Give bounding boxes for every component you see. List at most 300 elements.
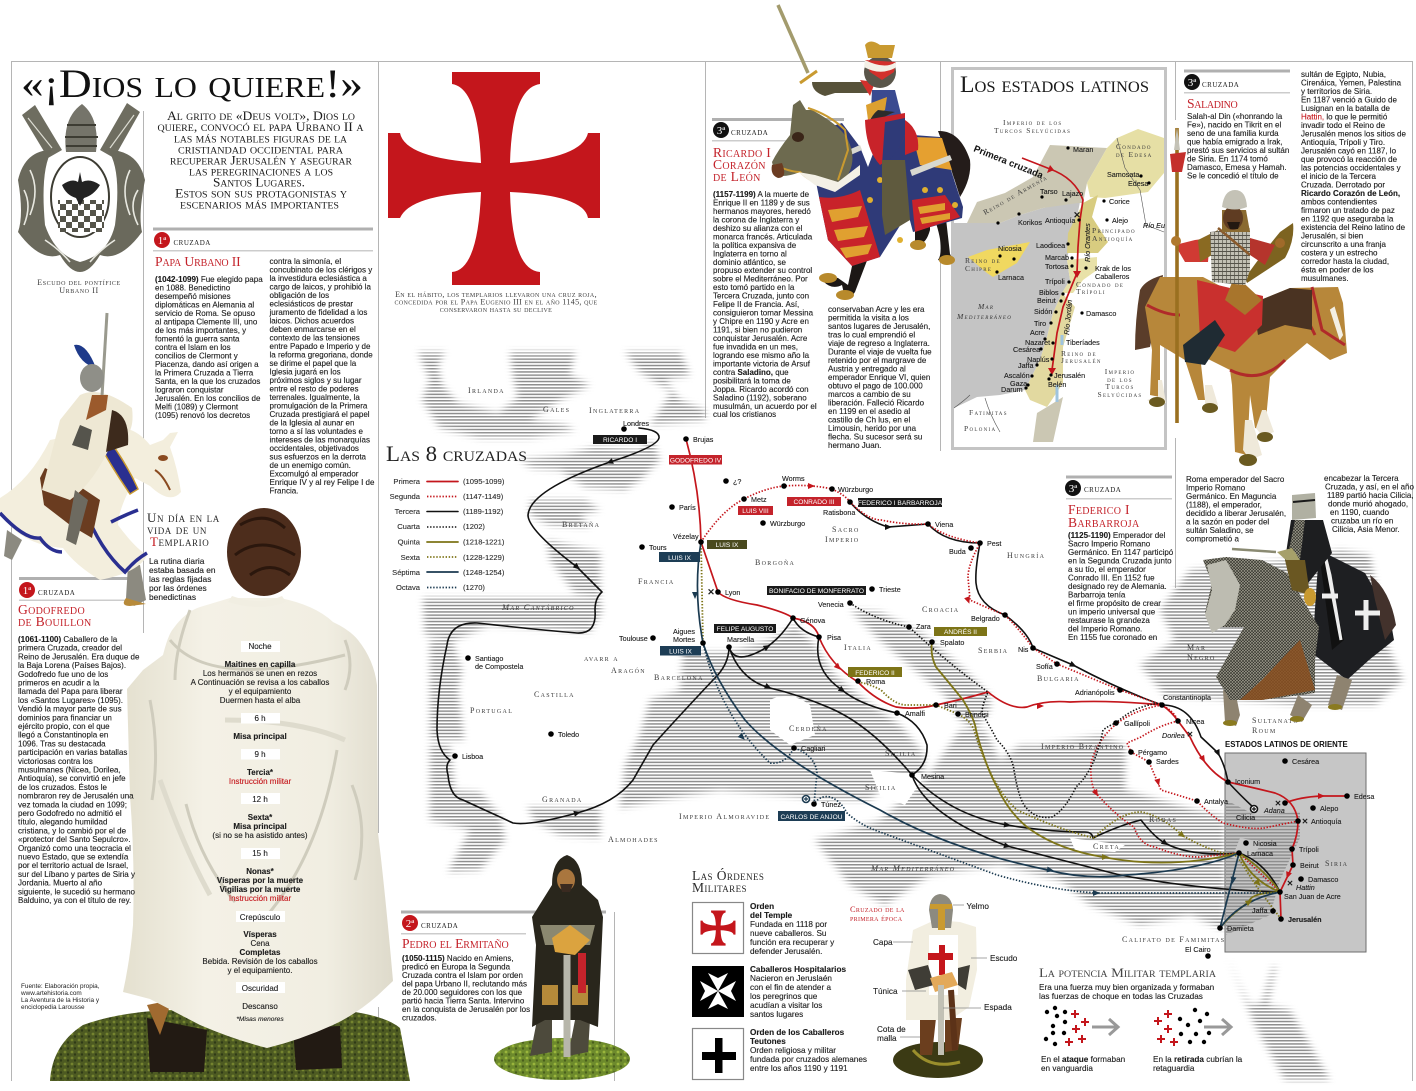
text: knights hospitaller: con el fin de atender a	[750, 983, 831, 992]
map: region labels: Francia	[638, 577, 675, 586]
map: city labels: Cesárea	[1292, 757, 1319, 766]
text: order of the temple: Fundada en 1118 por	[750, 920, 827, 929]
map: labels: Maran	[1073, 145, 1093, 154]
panel: Papa Urbano II: obligación de los	[270, 291, 329, 300]
map: city labels	[462, 419, 1374, 954]
diagram: attack formation: en vanguardia	[1041, 1064, 1093, 1073]
map: principality of antioch	[1067, 195, 1108, 253]
panel: daily schedule: Duermen hasta el alba	[220, 696, 301, 705]
panel: Ricardo I: Enrique II en 1189 y de sus	[713, 198, 810, 207]
panel: Papa Urbano II: Santa, en la que los cruzados	[155, 377, 260, 386]
panel: Saladino: Jerusalén cayó en 1187, lo	[1301, 146, 1397, 156]
panel: Federico I Barbarroja: del Imperio Romano.	[1068, 624, 1142, 634]
panel: Pedro el Ermitano: (1050-1115) Nacido en Amiens,	[402, 954, 514, 963]
panel: Saladino: de Siria. En 1174 tomó	[1187, 154, 1268, 164]
map: city labels: Iconium	[1235, 777, 1260, 786]
panel: Godofredo de Bouillon: Antioquía), se convirtió en jefe	[18, 774, 126, 783]
icon: large templar cross	[388, 72, 600, 285]
icon: templar knight with labels: Capa	[873, 938, 893, 947]
panel: Papa Urbano II: contra la simonía, el	[270, 257, 341, 266]
panel: Papa Urbano II: sus esfuerzos en la derrota	[270, 452, 367, 462]
map: region labels: Siria	[1325, 859, 1348, 868]
panel: Papa Urbano II: Jerusalén. En los concilios de	[155, 394, 261, 403]
panel: Ricardo I: y Chipre en 1190 y Acre en	[713, 317, 809, 326]
panel: Federico I Barbarroja: Germánico. En 1147 participó	[1068, 548, 1174, 557]
caption: templar cross: conservaron hasta su declive	[440, 305, 552, 314]
panel: Ricardo I: la corona de Inglaterra y	[713, 215, 799, 224]
map: region labels: Mar Mediterráneo	[870, 863, 955, 873]
panel: Federico I Barbarroja: en 1190, cuando	[1330, 508, 1390, 517]
panel: Papa Urbano II: intereses de las monarquías	[270, 436, 370, 444]
panel: Saladino: Antioquía, Trípoli y Tiro.	[1301, 138, 1385, 147]
panel: Federico I Barbarroja: Barbarroja	[1068, 515, 1140, 530]
text: order of the temple: nueve caballeros. Su	[750, 929, 827, 938]
panel: Godofredo de Bouillon: Jordania. Muerto al año	[18, 879, 103, 888]
icon: Peter the Hermit figure	[494, 855, 630, 1080]
panel: Godofredo de Bouillon: de Bouillon	[18, 614, 92, 629]
map: region labels: Roum	[1252, 726, 1277, 735]
panel: Godofredo de Bouillon: participación en varias batallas	[18, 748, 127, 757]
map: city labels: Würzburgo	[770, 519, 805, 528]
panel: Federico I Barbarroja: a la sazón en poder del	[1186, 518, 1269, 526]
map: region labels: Sultanato	[1252, 716, 1299, 725]
legend: crusades	[390, 477, 505, 592]
panel: Saladino: seno de una familia kurda	[1187, 129, 1279, 138]
panel: Federico I Barbarroja: 3ª	[1069, 483, 1078, 495]
map: route fourth crusade	[850, 603, 1162, 818]
map: city labels: Vézelay	[673, 532, 699, 541]
map: city labels: Amalfi	[905, 709, 925, 718]
panel: Pedro el Ermitano: en la conquista de Jerusalén por los	[402, 1005, 530, 1014]
panel: Ricardo I: cual los cristianos	[713, 410, 776, 419]
panel: Pedro el Ermitano: Cruzada contra el Islam por orden	[402, 971, 523, 980]
map: labels: Caballeros	[1095, 272, 1130, 281]
map: labels: Antioquía	[1045, 216, 1075, 225]
map: labels: Edesa	[1128, 179, 1148, 188]
panel: daily schedule: (si no se ha asistido antes)	[212, 831, 308, 840]
caption: crusader of the first period: Cruzado de la	[850, 905, 905, 914]
map: region labels: Mar Cantábrico	[501, 602, 575, 612]
icon: teutonic knights	[692, 1028, 744, 1080]
map: region labels: Granada	[542, 795, 583, 804]
panel: Ricardo I: propuso extender su control	[713, 266, 812, 275]
map: city labels: de Compostela	[475, 662, 523, 671]
panel: daily schedule: Tercia*	[247, 768, 274, 777]
map: county of edessa	[1087, 129, 1164, 198]
map: route arrowheads	[573, 458, 1325, 906]
panel: Ricardo I: Inglaterra en torno al	[713, 249, 787, 258]
panel: Ricardo I: consiguieron tomar Messina	[713, 309, 814, 318]
map: city labels: Antalya	[1204, 797, 1228, 806]
panel: Papa Urbano II: (1095) renovó los decretos	[155, 411, 250, 420]
panel: daily schedule: 6 h	[254, 714, 266, 723]
map: labels: Polonia	[964, 424, 996, 433]
panel: Ricardo I: Joppa. Ricardo acordó con	[713, 385, 809, 394]
panel: Saladino: firmaron un tratado de paz	[1301, 206, 1395, 215]
map: battle marks and sieges: ✕	[707, 587, 715, 597]
panel: Federico I Barbarroja: en la Segunda Cruzada junto	[1068, 556, 1172, 566]
map: labels: Gaza	[1010, 379, 1027, 388]
map: kingdom of jerusalem	[1025, 293, 1075, 407]
map: labels: Condado	[1116, 142, 1152, 151]
intro text: Al grito de «Deus volt», Dios lo	[167, 109, 356, 123]
map: route eighth crusade	[703, 643, 1280, 893]
map: labels: Imperio	[1105, 367, 1135, 376]
map: city labels: Londres	[623, 419, 649, 428]
panel: Papa Urbano II: se dirime el papel que la	[270, 359, 357, 368]
map: labels: Ascalón	[1004, 371, 1030, 380]
map: cyprus	[968, 242, 1030, 277]
panel: daily schedule: y el equipamiento.	[228, 966, 292, 975]
panel: Ricardo I: Tercera Cruzada, junto con	[713, 292, 809, 301]
map: labels: Marcab	[1045, 253, 1069, 262]
panel: Federico I Barbarroja: Sacro Imperio Romano	[1068, 540, 1151, 548]
icon: papal coat of arms	[18, 103, 145, 272]
text: military power intro: las fuerzas de choque en todas las Cruzadas	[1039, 992, 1203, 1001]
map: labels: Corice	[1109, 197, 1130, 206]
map: labels: Mediterráneo	[956, 312, 1012, 321]
map: city labels: Beirut	[1300, 861, 1319, 870]
panel: Federico I Barbarroja: Federico I	[1068, 502, 1130, 517]
panel: Papa Urbano II: contexto de las tensiones	[270, 334, 360, 342]
panel: Godofredo de Bouillon: por el territorio actual de Israel,	[18, 861, 128, 870]
map: region labels: Sicilia	[885, 749, 917, 758]
panel: estados latinos de oriente box: ESTADOS LATINOS DE ORIENTE	[1225, 740, 1348, 749]
panel: Saladino: En 1187 venció a Guido de	[1301, 96, 1397, 104]
panel: daily schedule: 12 h	[252, 795, 268, 804]
map: route seventh crusade	[697, 542, 1280, 928]
panel: Papa Urbano II: Enrique IV y al rey Felipe I de	[270, 478, 375, 487]
panel: Federico I Barbarroja: Cruzada, y así, en el año	[1325, 482, 1414, 492]
map: city labels: Brujas	[693, 435, 714, 444]
panel: Ricardo I: la política expansiva de	[713, 241, 797, 250]
panel: Saladino: Saladino	[1187, 96, 1238, 111]
panel: Ricardo I: permitida la visita a los	[828, 314, 909, 322]
heading: las ordenes militares: Las Órdenes	[692, 868, 764, 883]
panel: Godofredo de Bouillon: Godofredo	[18, 602, 85, 617]
caption: coat of arms: Urbano II	[59, 286, 99, 295]
panel: Godofredo de Bouillon: cruzada	[38, 587, 75, 598]
panel: Godofredo de Bouillon: título, alegando humildad	[18, 818, 107, 827]
panel: daily schedule: Cena	[250, 939, 270, 948]
panel: daily schedule: Sexta*	[248, 813, 273, 822]
map: city labels: Spalato	[940, 638, 964, 647]
panel: Papa Urbano II: deben enmarcarse en el	[270, 325, 356, 334]
panel: Federico I Barbarroja: cruzada	[1084, 484, 1121, 495]
map: city labels: Worms	[782, 474, 805, 483]
panel: los estados latinos map	[952, 68, 1166, 448]
map: labels: Río Orantes	[1083, 223, 1092, 262]
text: order of the temple: defender Jerusalén.	[750, 947, 822, 956]
panel: Federico I Barbarroja: sultán Saladino, se	[1186, 526, 1254, 535]
map: city labels: Nicosia	[1253, 839, 1277, 848]
panel: Ricardo I: sobre el Mediterráneo. Por	[713, 275, 808, 284]
map: first crusade route	[1022, 158, 1083, 375]
map: region labels: Negro	[1187, 653, 1216, 662]
map: labels: Krak de los	[1095, 264, 1131, 273]
panel: Godofredo de Bouillon: la Baja Lorena (Países Bajos).	[18, 661, 126, 670]
map: leader labels: FELIPE AUGUSTO	[717, 626, 773, 633]
panel: Godofredo de Bouillon: siguiente, le sucedió su hermano	[18, 887, 136, 896]
icon: templar knight with labels: Túnica	[873, 987, 898, 996]
map: city labels: Marsella	[727, 635, 754, 644]
map: region labels: Imperio Bizantino	[1041, 742, 1124, 751]
map: route third crusade	[437, 428, 1280, 892]
map: city labels: Hattin	[1296, 883, 1315, 892]
panel: Godofredo de Bouillon: ejército propio, con el que	[18, 722, 110, 731]
map: region labels: Gales	[543, 405, 570, 414]
icon: order of the temple	[692, 902, 744, 954]
panel: Ricardo I: Ricardo I	[713, 145, 771, 160]
panel: Federico I Barbarroja: Germánico. En Maguncia	[1186, 492, 1276, 501]
text: order of the temple: Orden	[750, 902, 774, 911]
icon: templar knight with labels: malla	[877, 1034, 897, 1043]
panel: daily schedule: Vísperas	[243, 930, 277, 939]
panel: daily schedule: Misa principal	[233, 732, 287, 741]
map: city labels: Cilicia	[1236, 813, 1255, 822]
map: battle marks and sieges: ✕	[1287, 879, 1293, 888]
heading: un dia en la vida de un templario: Un día en la	[147, 510, 220, 525]
text: teutonic knights: fundada por cruzados alemanes	[750, 1055, 867, 1064]
panel: Ricardo I: emperador Enrique VI, quien	[828, 373, 930, 382]
panel: Ricardo I: contra Saladino, que	[713, 368, 789, 377]
panel: Godofredo de Bouillon: llegó a Constantinopla en	[18, 731, 108, 740]
map: region labels: avarr a	[584, 654, 619, 663]
panel: Godofredo de Bouillon: vez tomada la ciudad en 1099;	[18, 800, 127, 809]
map: leader labels: LUIS IX	[716, 542, 739, 549]
map: city labels: Nis	[1018, 645, 1029, 654]
icon: templar knight with labels: Escudo	[990, 954, 1018, 963]
panel: Saladino: circunscrito a una franja	[1301, 240, 1386, 249]
panel: Saladino: Cirenáica, Yemen, Palestina	[1301, 78, 1402, 88]
map: labels: de los	[1107, 375, 1133, 384]
map: city labels: Venecia	[818, 600, 844, 609]
legend: crusades: (1147-1149)	[463, 492, 504, 501]
map: labels: Nazaret	[1025, 338, 1050, 347]
legend: crusades: (1248-1254)	[463, 568, 505, 577]
panel: Pedro el Ermitano: predicó en Europa la Segunda	[402, 962, 511, 972]
panel: Saladino: ésta en poder de los	[1301, 266, 1374, 274]
map: labels: Naplús	[1027, 355, 1050, 364]
panel: Papa Urbano II: laicos. Dichos acuerdos	[270, 316, 354, 326]
map: city labels: Constantinopla	[1163, 693, 1211, 702]
map: city labels: Viena	[935, 520, 953, 529]
icon: templar figure from behind	[50, 508, 410, 1081]
map: region labels: Hungría	[1007, 551, 1045, 560]
map: labels: Trípoli	[1045, 277, 1065, 286]
map: city labels: Roma	[866, 677, 885, 686]
panel: Saladino: el inicio de la Tercera	[1301, 172, 1377, 181]
panel: Godofredo de Bouillon: 1096. Tras su destacada	[18, 739, 106, 748]
panel: Papa Urbano II: cargo de laicos, y prohibió la	[270, 282, 371, 292]
map: region labels: Croacia	[922, 605, 959, 614]
text: sources: Fuente: Elaboración propia,	[21, 983, 100, 990]
panel: Ricardo I: cruzada	[731, 127, 768, 138]
panel: Pedro el Ermitano: 2ª	[406, 918, 415, 930]
panel: Ricardo I: dominio atlántico, se	[713, 258, 786, 267]
map: region labels: Bulgaria	[1037, 674, 1080, 683]
map: city labels: Túnez	[821, 800, 841, 809]
panel: Saladino: que provocó la reacción de	[1301, 155, 1398, 164]
panel: Ricardo I: 3ª	[717, 125, 726, 137]
map: labels: de Edesa	[1116, 150, 1153, 159]
map: labels: Laodicea	[1036, 241, 1065, 250]
map: battle marks and sieges: ✕	[1187, 730, 1193, 739]
map: region labels: Barcelona	[654, 673, 704, 682]
panel: Godofredo de Bouillon: «protector del Santo Sepulcro».	[18, 835, 131, 844]
map: city labels: Damieta	[1227, 924, 1254, 933]
panel: Godofredo de Bouillon: sur del Líbano y partes de Siria y	[18, 870, 135, 879]
map: city labels: Ratisbona	[823, 508, 855, 517]
panel: daily schedule: Instrucción militar	[229, 777, 291, 786]
panel: Saladino: Hattin, lo que le permitió	[1301, 112, 1387, 122]
map: labels: Tiro	[1034, 319, 1046, 328]
panel: estados latinos de oriente box	[1225, 740, 1366, 952]
map: leader labels: FEDERICO II	[855, 670, 895, 677]
panel: Ricardo I: de León	[713, 169, 761, 184]
map: labels: ✕	[1073, 210, 1081, 220]
panel: Pedro el Ermitano	[401, 910, 606, 1022]
map: labels: Chipre	[965, 264, 992, 273]
panel: Saladino: Jerusalén, si bien	[1301, 232, 1363, 240]
panel: Papa Urbano II: 1ª	[158, 235, 167, 247]
panel: daily schedule: Vísperas por la muerte	[217, 876, 304, 885]
map: leader labels: BONIFACIO DE MONFERRATO	[769, 588, 864, 595]
panel: Federico I Barbarroja: a su tío, el emperador	[1068, 565, 1146, 574]
panel: Papa Urbano II: entre Papado e Imperio y de	[270, 342, 371, 351]
map: city labels: Lyon	[725, 588, 740, 597]
panel: los estados latinos map: Primera cruzada	[972, 144, 1045, 182]
panel: Ricardo I	[712, 118, 932, 450]
legend: crusades: Cuarta	[397, 522, 421, 531]
heading: las ordenes militares: Militares	[692, 880, 747, 895]
map: leader labels: LUIS VIII	[742, 508, 769, 515]
legend: crusades: (1095-1099)	[463, 477, 505, 486]
text: routine intro: benedictinas	[149, 592, 196, 602]
panel: Papa Urbano II: la Primera Cruzada a Tierra	[155, 368, 254, 378]
map: region labels: Serbia	[978, 646, 1008, 655]
map: city labels: Mortes	[673, 635, 695, 644]
map: city labels: Pérgamo	[1138, 748, 1167, 757]
panel: Ricardo I: Felipe II de Francia. Así,	[713, 300, 799, 309]
text: teutonic knights: entre los años 1190 y 1191	[750, 1064, 848, 1073]
panel: Federico I Barbarroja: (1188), el emperador,	[1186, 500, 1262, 510]
map: region labels: Italia	[844, 643, 872, 652]
text: military power intro: Era una fuerza muy bien organizada y formaban	[1039, 983, 1214, 992]
panel: Godofredo de Bouillon: Godofredo fue uno de los	[18, 670, 108, 679]
panel: Papa Urbano II: Francia.	[270, 486, 298, 496]
map: seljuk territory	[967, 145, 1107, 223]
map: labels: Reino de	[965, 256, 1001, 265]
panel: Papa Urbano II: torno a sí las voluntades e	[270, 427, 363, 436]
map: labels: Selyúcidas	[1097, 390, 1143, 399]
map: route second crusade	[701, 485, 1298, 892]
map: labels: Turcos Selyúcidas	[994, 126, 1071, 135]
text: sources: enciclopedia Larousse	[21, 1004, 85, 1011]
panel: Federico I Barbarroja: Conrado III. En 1152 fue	[1068, 574, 1155, 582]
map: leader labels: ANDRÉS II	[944, 627, 977, 636]
panel: daily schedule: Crepúsculo	[240, 913, 281, 922]
map: battle marks and sieges	[707, 587, 1308, 888]
intro text	[158, 109, 364, 212]
map: city labels: Edesa	[1354, 792, 1374, 801]
map: labels: Fatimitas	[969, 408, 1008, 417]
panel: Papa Urbano II: desempeñó misiones	[155, 292, 231, 301]
panel: Federico I Barbarroja: un imperio universal que	[1068, 608, 1156, 616]
panel: Saladino: en 1192 que aseguraba la	[1301, 214, 1394, 224]
map: region labels: Borgoña	[755, 558, 795, 567]
map: labels: Condado de	[1076, 280, 1124, 289]
heading: un dia en la vida de un templario: vida de un	[147, 522, 207, 537]
map: labels: Beirut	[1037, 296, 1056, 305]
map: region labels	[468, 386, 1348, 944]
panel: Papa Urbano II: Piacenza, dando así origen a	[155, 360, 259, 369]
panel: los estados latinos map: Los estados latinos	[960, 72, 1149, 97]
text: order of the temple: del Temple	[750, 911, 793, 920]
map: labels: Trípoli	[1076, 287, 1106, 296]
panel: daily schedule: *Misas menores	[236, 1016, 284, 1023]
panel: Saladino: que había emigrado a Irak,	[1187, 138, 1283, 146]
intro text: Estos son sus protagonistas y	[175, 186, 348, 200]
map: labels: Imperio de los	[1003, 118, 1062, 127]
text: knights hospitaller: Nacieron en Jeruslaén	[750, 974, 832, 983]
panel: Papa Urbano II: cruzada	[174, 237, 211, 248]
panel: Pedro el Ermitano: cruzados.	[402, 1014, 437, 1022]
panel: Ricardo I: liberación. Falleció Ricardo	[828, 398, 925, 408]
map: region labels: Portugal	[470, 706, 513, 715]
panel: daily schedule: Bebida. Revisión de los caballos	[202, 957, 318, 966]
panel: Godofredo de Bouillon: llamada del Papa para liberar	[18, 687, 123, 696]
heading: un dia en la vida de un templario: Templario	[150, 534, 209, 549]
panel: daily schedule: 9 h	[254, 750, 266, 759]
panel: daily schedule: Instrucción militar	[229, 894, 291, 903]
panel: Federico I Barbarroja: (1125-1190) Emperador del	[1068, 531, 1165, 540]
map: labels: Tarso	[1040, 187, 1058, 196]
map: city dots	[452, 426, 1350, 959]
map: labels: Belén	[1048, 380, 1066, 389]
panel: Saladino: sultán de Egipto, Nubia,	[1301, 70, 1386, 79]
panel: Saladino: ambos contendientes	[1301, 198, 1377, 206]
text: sources: La Aventura de la Historia y	[21, 997, 100, 1004]
panel: Ricardo I: Limousin, herido por una	[828, 424, 917, 433]
panel: Papa Urbano II	[153, 228, 375, 496]
panel: Saladino: cruzada	[1202, 79, 1239, 90]
panel: Godofredo de Bouillon: pero Godofredo no admitió el	[18, 809, 122, 818]
panel: Papa Urbano II: de un enemigo común.	[270, 461, 351, 470]
panel: Godofredo de Bouillon: los «Santos Lugares» (1095).	[18, 696, 123, 705]
map: region labels: Mar	[1187, 643, 1206, 652]
map: labels: Acre	[1030, 328, 1045, 337]
map: labels: Tortosa	[1045, 262, 1069, 271]
intro text: recuperar Jerusalén y asegurar	[170, 154, 352, 168]
panel: Papa Urbano II: próximos siglos y su lugar	[270, 376, 362, 385]
map: leader labels: RICARDO I	[603, 437, 637, 444]
map: city labels: Toledo	[558, 730, 579, 739]
map: labels: Turcos	[1105, 382, 1135, 391]
map: labels: Reino de Armenia	[982, 172, 1049, 217]
legend: crusades: (1218-1221)	[463, 538, 505, 546]
panel: Federico I Barbarroja: donde murió ahogado,	[1328, 500, 1408, 508]
panel: Federico I Barbarroja: encabezar la Tercera	[1324, 474, 1399, 483]
caption: crusader of the first period: primera época	[850, 914, 903, 923]
panel: daily schedule: Misa principal	[233, 822, 287, 831]
map: leader labels: CARLOS DE ANJOU	[781, 814, 843, 821]
panel: Godofredo de Bouillon: victoriosas contra los	[18, 757, 93, 766]
text: knights hospitaller: Caballeros Hospitalarios	[750, 965, 846, 974]
map: city labels: Pest	[987, 539, 1001, 548]
map: city labels: Belgrado	[971, 614, 1000, 623]
icon: knights hospitaller	[692, 966, 744, 1017]
